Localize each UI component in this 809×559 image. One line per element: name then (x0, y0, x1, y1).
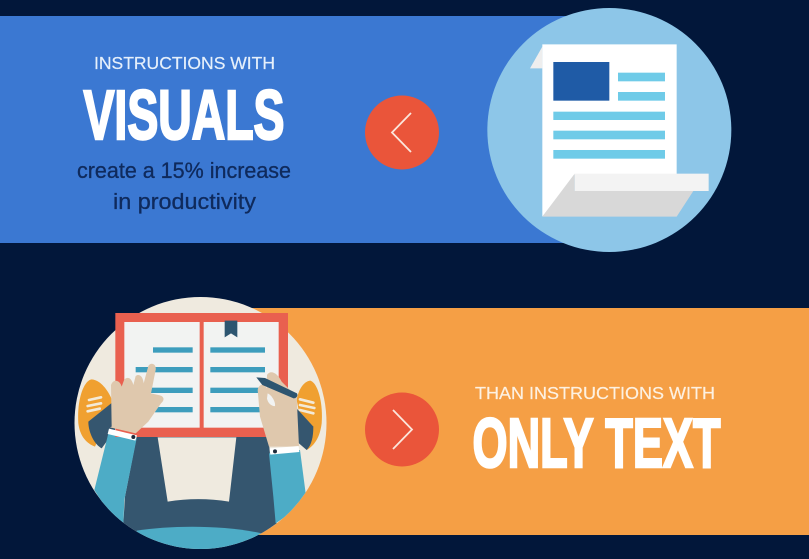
panel: only text (230, 308, 809, 535)
icon: document (487, 8, 731, 252)
label: than instructions with: THAN INSTRUCTIONS WITH (475, 383, 715, 403)
book and hands (108, 313, 299, 455)
icon: right chevron (365, 392, 439, 466)
label: instructions with: INSTRUCTIONS WITH (94, 53, 275, 73)
icon: person reading book (74, 297, 326, 553)
heading: visuals: VISUALS (84, 76, 284, 154)
shoes (78, 379, 113, 447)
text: productivity statement: create a 15% increase (77, 158, 291, 183)
panel: visuals (0, 16, 590, 243)
text: productivity statement: in productivity (113, 189, 256, 214)
body clipped to circle (94, 433, 306, 553)
icon: left chevron (365, 96, 439, 170)
text: productivity statement (77, 158, 291, 214)
